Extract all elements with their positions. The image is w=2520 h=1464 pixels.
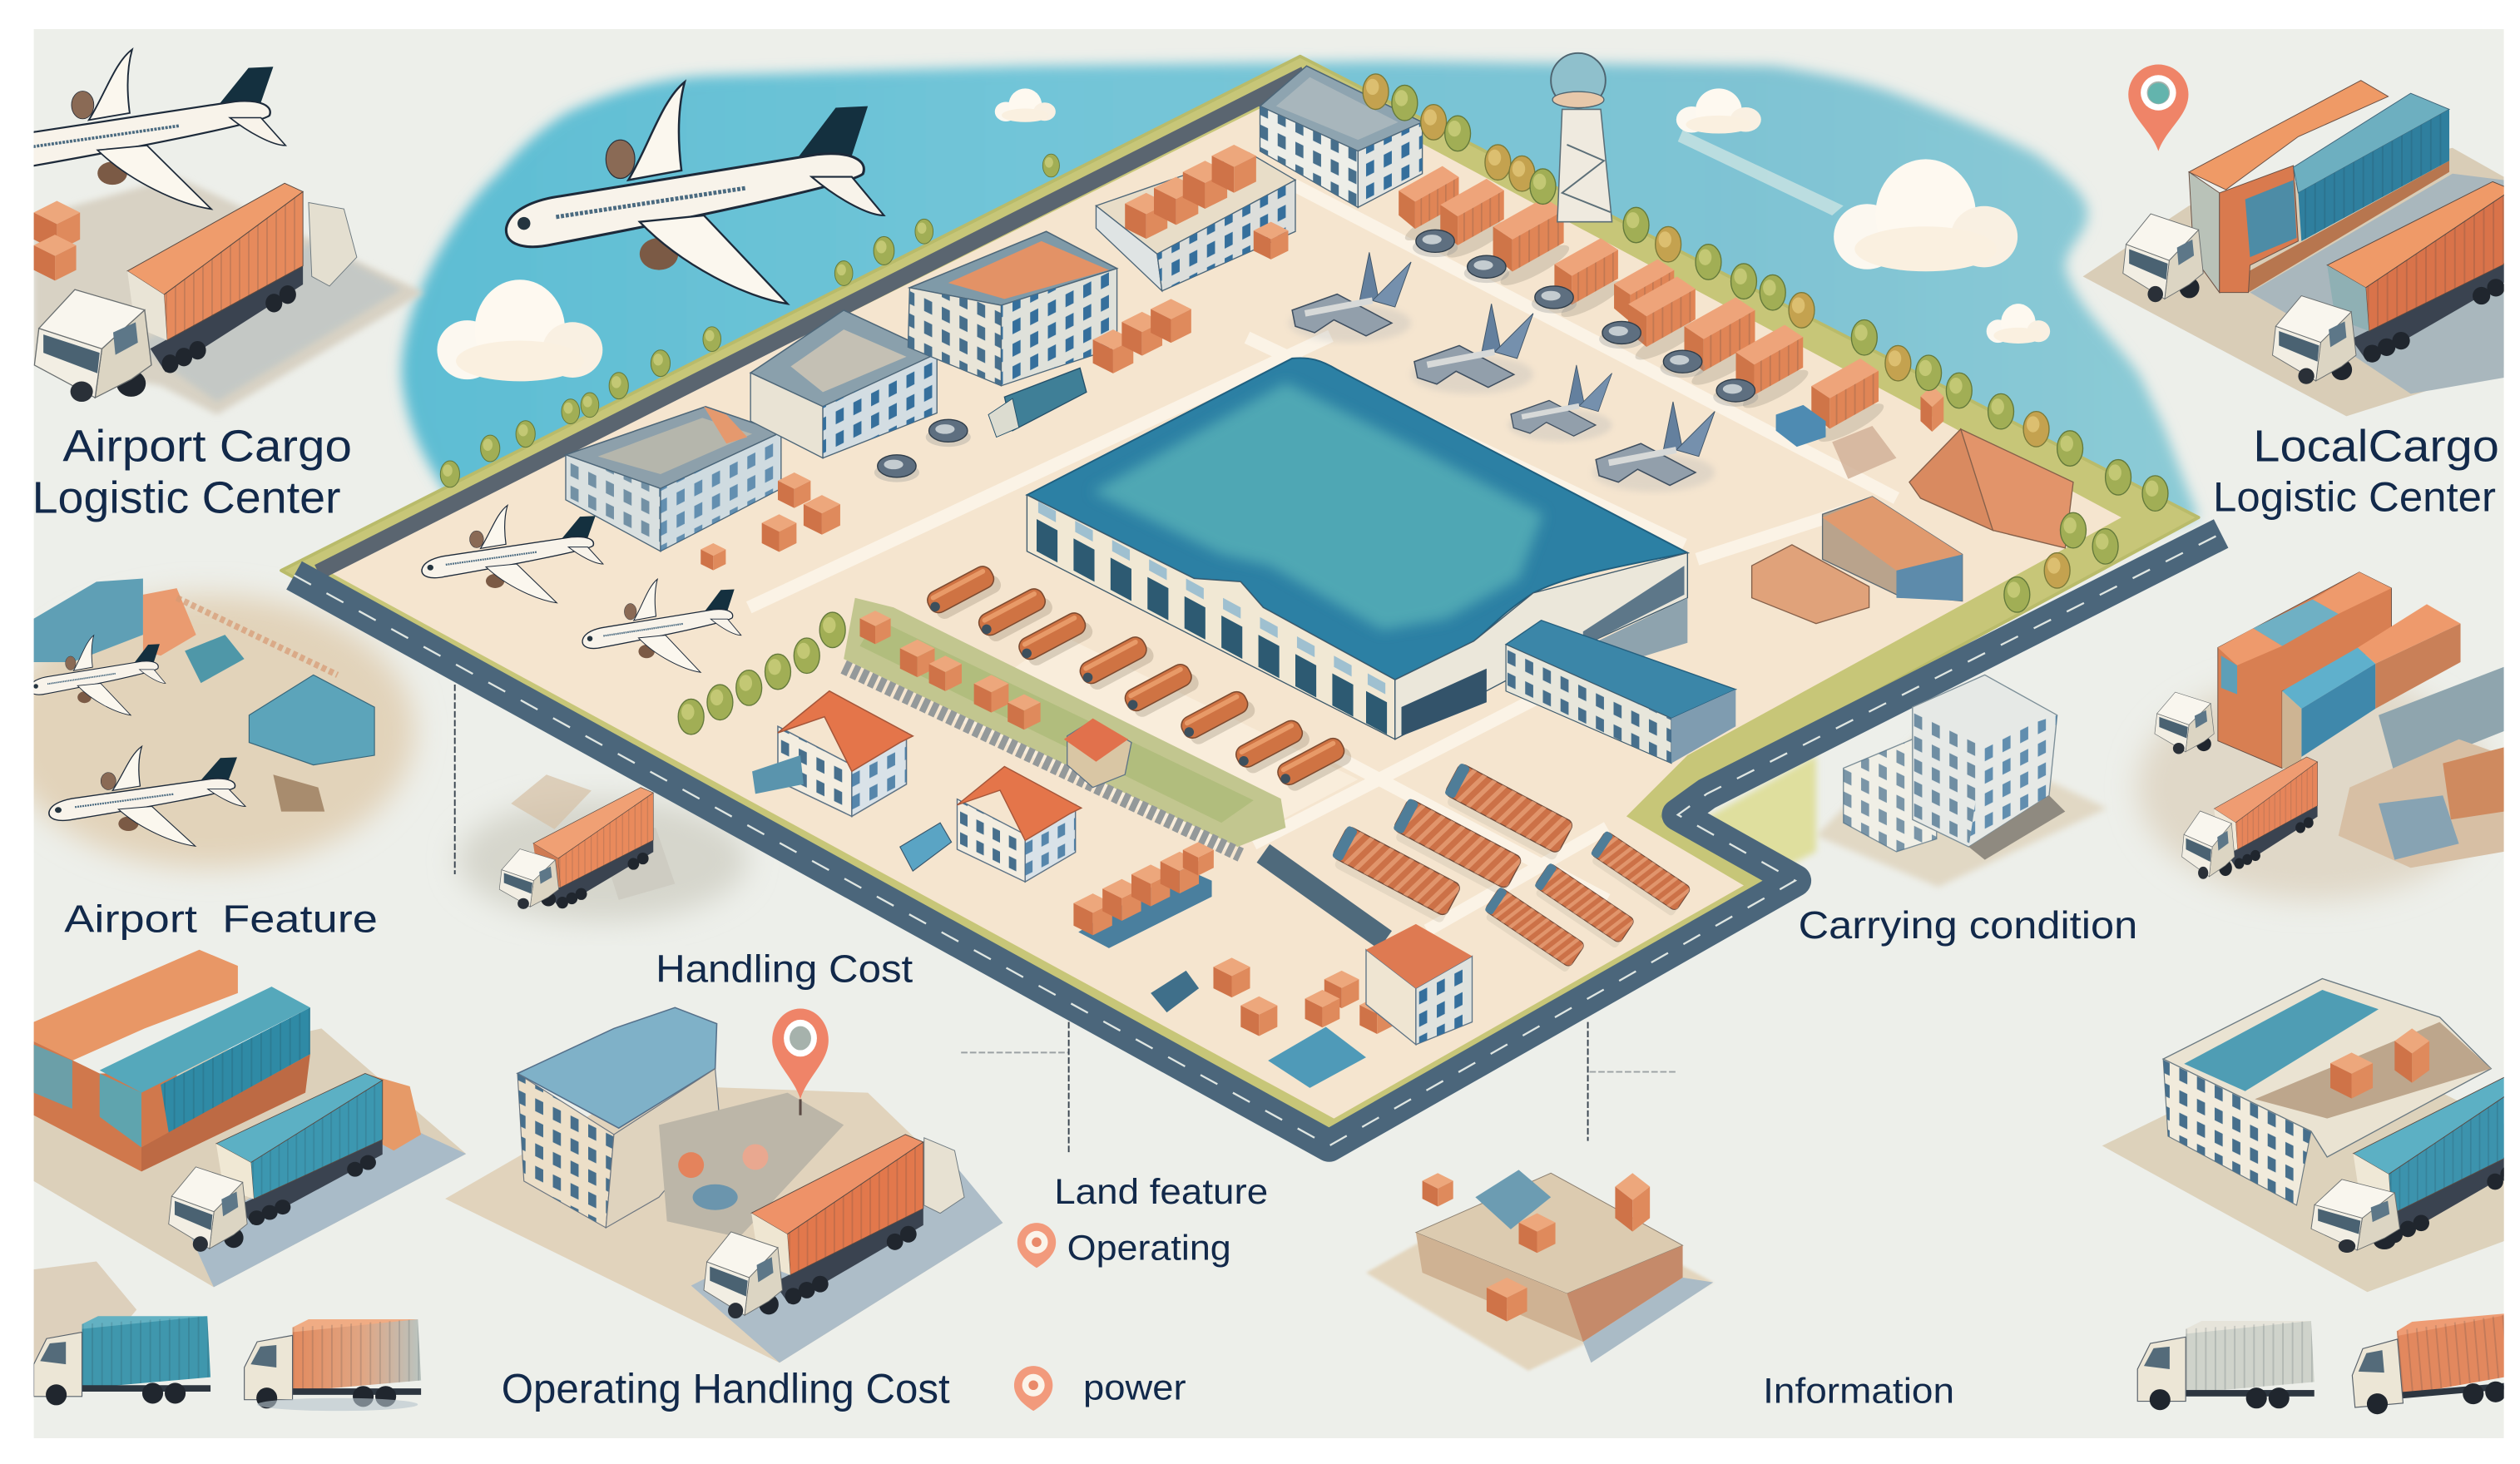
internal roads bbox=[749, 185, 1896, 931]
label: Operating Handling Cost: Operating Handling Cost bbox=[502, 1366, 950, 1412]
annex windows bbox=[1506, 645, 1671, 764]
doors bbox=[1037, 502, 1387, 734]
label: Carrying condition: Carrying condition bbox=[1799, 903, 2137, 947]
plane: flying over the map bbox=[506, 82, 884, 304]
containers: upper right field bbox=[1399, 166, 1943, 479]
plate: top-right road bbox=[2250, 174, 2504, 393]
lower map crates and vehicles bbox=[1073, 842, 1394, 1088]
plate: left lower truck ground bbox=[34, 1028, 466, 1287]
plate: right stack ground bbox=[2137, 675, 2491, 900]
side trucks bottom-left bbox=[34, 1262, 421, 1411]
side doors bbox=[1401, 669, 1487, 736]
trees inside map bbox=[678, 612, 845, 734]
pin: top right bbox=[2128, 65, 2188, 151]
plate: truck shadow beneath left lower truck bbox=[191, 1133, 466, 1288]
label: Information: Information bbox=[1763, 1372, 1954, 1412]
building E bbox=[566, 407, 781, 551]
grass border bbox=[281, 57, 2199, 1138]
label: Handling Cost: Handling Cost bbox=[656, 947, 913, 990]
title: Airport Cargo Logistic Center: Logistic Center bbox=[32, 472, 341, 522]
side wall bbox=[1395, 553, 1687, 739]
inner lot shading bbox=[948, 635, 1358, 852]
vignette: right container stack bbox=[2218, 572, 2504, 868]
vignette: city buildings bbox=[1844, 675, 2065, 860]
plate: city ground bbox=[1816, 723, 2107, 887]
fence strip bbox=[844, 667, 1240, 855]
plate: top-left truck ground bbox=[34, 177, 424, 414]
truck: mid-left orange bbox=[499, 774, 675, 909]
truck: handling cost orange bbox=[704, 1135, 964, 1318]
crates top-left bbox=[34, 201, 80, 280]
building: handling cost bbox=[517, 1007, 844, 1238]
plate: handling cost ground bbox=[445, 1085, 1003, 1363]
truck: right mid orange bbox=[2182, 757, 2318, 879]
upper-left road bbox=[318, 74, 1305, 572]
icon: operating pin bbox=[1017, 1223, 1056, 1268]
inner dark road bbox=[1263, 853, 1385, 940]
ground jets bbox=[1289, 252, 1715, 492]
title: LocalCargo Logistic Center: Logistic Center bbox=[2213, 473, 2496, 520]
road markings bbox=[295, 533, 2221, 1145]
cargo trailers in front of hangar bbox=[924, 561, 1354, 795]
truck: lower-left blue bbox=[169, 1073, 421, 1252]
title: Airport Cargo Logistic Center bbox=[32, 421, 352, 522]
building C bbox=[908, 231, 1117, 386]
title: LocalCargo Logistic Center bbox=[2213, 421, 2499, 520]
vignette: left airport feature bbox=[29, 579, 374, 846]
vignette: lower right warehouse bbox=[2163, 979, 2491, 1205]
pale yellow patch outside road bbox=[1704, 755, 1816, 868]
plane: top-left bbox=[0, 49, 285, 209]
striped cargo bundles bbox=[1328, 763, 1691, 973]
label: Land feature: Land feature bbox=[1054, 1173, 1268, 1212]
blue truck near buildings bbox=[988, 368, 1087, 438]
truck: lower right blue bbox=[2311, 1076, 2520, 1253]
sky behind the map bbox=[393, 52, 2204, 536]
small orange roof building bbox=[1366, 924, 1472, 1045]
crates near buildings bbox=[701, 222, 1288, 571]
hut in park bbox=[1064, 719, 1131, 788]
warehouses: orange crated buildings at right bbox=[1752, 429, 2073, 624]
trees along upper-right edge bbox=[1363, 74, 2168, 612]
trees along upper-left edge bbox=[440, 154, 1059, 487]
building A bbox=[1260, 66, 1423, 207]
pin: handling cost bbox=[772, 1009, 829, 1099]
plate: top-right ground bbox=[2083, 148, 2504, 416]
parked planes bbox=[422, 506, 741, 672]
title: Airport Cargo Logistic Center: Airport Cargo bbox=[62, 421, 352, 471]
icon: power pin bbox=[1014, 1366, 1052, 1411]
annex front wall bbox=[1506, 645, 1671, 764]
clouds bbox=[437, 88, 2050, 381]
label: Operating: Operating bbox=[1067, 1229, 1231, 1269]
contrail bbox=[1678, 131, 1844, 215]
van: right stack bbox=[2155, 692, 2214, 754]
vignette: top-right container stack bbox=[2189, 81, 2449, 293]
lower road bbox=[295, 533, 2221, 1145]
map land bbox=[281, 57, 2221, 1145]
leader lines bbox=[455, 685, 1678, 1154]
plate: lower centre ground bbox=[1366, 1243, 1713, 1372]
plate: handling truck shadow bbox=[691, 1157, 1003, 1363]
truck: right orange bbox=[2273, 181, 2512, 384]
plate: truck ground left small bbox=[458, 799, 747, 921]
label: power: power bbox=[1083, 1369, 1186, 1408]
ground bbox=[329, 84, 2121, 1119]
plate: lower right ground bbox=[2102, 1095, 2504, 1293]
label: Airport Feature: Airport Feature bbox=[64, 898, 378, 941]
side trucks bottom-right bbox=[2137, 1312, 2520, 1417]
plate: top-left truck road bbox=[136, 241, 402, 402]
truck: top-left orange bbox=[34, 183, 357, 402]
title: LocalCargo Logistic Center: LocalCargo bbox=[2253, 421, 2499, 471]
blue van bbox=[900, 823, 952, 871]
ground shadow at back bbox=[1511, 598, 1687, 683]
roof bbox=[1027, 358, 1687, 680]
green park strip bbox=[844, 598, 1385, 940]
pin stem bbox=[800, 1099, 801, 1115]
houses bbox=[752, 691, 1082, 882]
building B bbox=[1096, 145, 1295, 291]
roof highlight bbox=[1093, 383, 1542, 630]
control tower bbox=[1551, 53, 1612, 222]
vignette: lower centre warehouse bbox=[1416, 1170, 1713, 1363]
annex roof bbox=[1506, 621, 1735, 719]
container stack: lower left bbox=[34, 950, 310, 1171]
front wall bbox=[1027, 495, 1395, 739]
hangar: main warehouse bbox=[1027, 358, 1735, 764]
building D bbox=[750, 310, 937, 458]
plate: left airport feature ground bbox=[3, 595, 414, 868]
annex end wall bbox=[1671, 690, 1735, 764]
truck: top right cab bbox=[2123, 214, 2203, 302]
